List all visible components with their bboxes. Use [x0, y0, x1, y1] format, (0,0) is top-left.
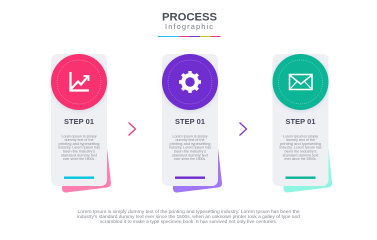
back card: mint [284, 148, 332, 193]
heading: PROCESS: PROCESS [162, 12, 217, 24]
body text: Lorem Ipsum is simply [62, 133, 97, 138]
circle badge [272, 54, 328, 110]
arrow: purple chevron [240, 122, 246, 136]
body text: industry. Lorem Ipsum has [280, 145, 322, 150]
body text: dummy text of the [286, 137, 315, 142]
front card [51, 54, 107, 186]
circle badge [162, 54, 218, 110]
body text: Lorem Ipsum is simply [172, 133, 208, 138]
body text: printing and typesetting [280, 141, 321, 146]
body text: ever since the 1500s. [174, 156, 206, 161]
back card: pink [62, 148, 111, 193]
body text: printing and typesetting [170, 141, 210, 146]
body text: ever since the 1500s. [63, 156, 95, 161]
body text: been the industry's [284, 148, 317, 154]
body text: dummy text of the [64, 137, 94, 142]
icon: gear [179, 71, 201, 93]
body text: Lorem Ipsum is simply [283, 133, 318, 138]
back card: purple [173, 148, 222, 193]
body text [169, 133, 211, 161]
accent bar [286, 176, 316, 179]
step label: STEP 01 [286, 117, 316, 126]
arrow: pink chevron [128, 122, 136, 136]
footer text: industry's standard dummy text ever since the 1500s, when an unknown printer took a galley of type and [77, 214, 300, 220]
dashed ring [168, 60, 212, 104]
title underline [158, 36, 220, 37]
subheading: Infographic: Infographic [165, 22, 213, 31]
dashed ring [278, 60, 322, 104]
footer text: scrambled it to make a type specimen book. It has survived not only five centuries. [100, 219, 277, 225]
body text: been the industry's [174, 148, 206, 154]
body text: ever since the 1500s. [284, 156, 316, 161]
body text: been the industry's [63, 148, 95, 154]
body text: standard dummy text [172, 152, 209, 157]
body text: standard dummy text [282, 152, 319, 157]
panel: step 1 [51, 54, 111, 193]
accent bar [175, 176, 205, 179]
front card [162, 54, 218, 186]
body text: industry. Lorem Ipsum has [169, 145, 211, 150]
circle badge [51, 54, 107, 110]
icon: envelope [290, 74, 312, 90]
title [158, 12, 220, 37]
accent bar [64, 176, 94, 179]
body text [280, 133, 322, 161]
step label: STEP 01 [175, 117, 205, 126]
icon: growth chart [70, 72, 89, 90]
body text: standard dummy text [61, 152, 98, 157]
body text: dummy text of the [176, 137, 204, 142]
dashed ring [57, 60, 101, 104]
body text [58, 133, 100, 161]
panel: step 2 [162, 54, 222, 193]
panel: step 3 [272, 54, 332, 193]
footer text [77, 209, 300, 225]
front card [272, 54, 328, 186]
footer text: Lorem Ipsum is simply dummy text of the printing and typesetting industry. Lorem Ipsum has been the [78, 209, 300, 215]
step label: STEP 01 [64, 117, 94, 126]
body text: printing and typesetting [58, 141, 100, 146]
body text: industry. Lorem Ipsum has [58, 145, 100, 150]
